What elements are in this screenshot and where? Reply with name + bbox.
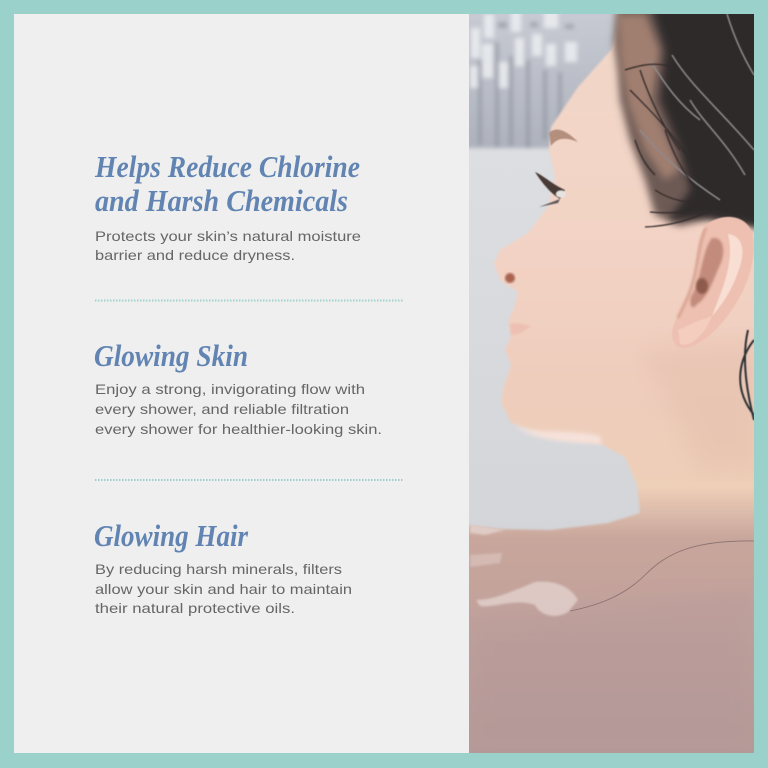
text: glowing skin description: every shower, and reliable filtration bbox=[95, 401, 349, 417]
heading: chlorine bbox=[94, 149, 360, 218]
eye and lashes bbox=[535, 130, 578, 207]
foam on shoulder bbox=[470, 525, 578, 616]
lips bbox=[510, 323, 531, 335]
text: glowing skin description: Enjoy a strong, invigorating flow with bbox=[95, 381, 365, 397]
text: chlorine description: Protects your skin’s natural moisture bbox=[95, 228, 361, 244]
text: glowing hair description bbox=[95, 561, 352, 616]
chin foam bbox=[518, 428, 602, 445]
photo: woman in shower bbox=[459, 4, 765, 765]
shoulder shading bbox=[469, 590, 754, 753]
shower head water bbox=[469, 14, 618, 150]
text: glowing hair description: their natural protective oils. bbox=[95, 600, 295, 616]
nostril bbox=[505, 273, 515, 283]
ear bbox=[672, 217, 754, 348]
neck shadow bbox=[662, 354, 748, 446]
panel: text bbox=[14, 14, 469, 753]
heading: chlorine: Helps Reduce Chlorine bbox=[94, 149, 360, 184]
text: glowing hair description: By reducing harsh minerals, filters bbox=[95, 561, 342, 577]
wet hair strands bbox=[740, 330, 754, 420]
stray hair on shoulder bbox=[570, 541, 754, 611]
text: glowing hair description: allow your skin and hair to maintain bbox=[95, 581, 352, 597]
body skin bbox=[469, 34, 754, 753]
heading: chlorine: and Harsh Chemicals bbox=[95, 183, 348, 218]
heading: glowing skin: Glowing Skin bbox=[94, 338, 248, 373]
text: chlorine description: barrier and reduce dryness. bbox=[95, 247, 295, 263]
text: chlorine description bbox=[95, 228, 361, 263]
hair bbox=[614, 4, 765, 228]
heading: glowing hair: Glowing Hair bbox=[94, 518, 249, 553]
text: glowing skin description: every shower for healthier-looking skin. bbox=[95, 421, 382, 437]
text: glowing skin description bbox=[95, 381, 382, 437]
